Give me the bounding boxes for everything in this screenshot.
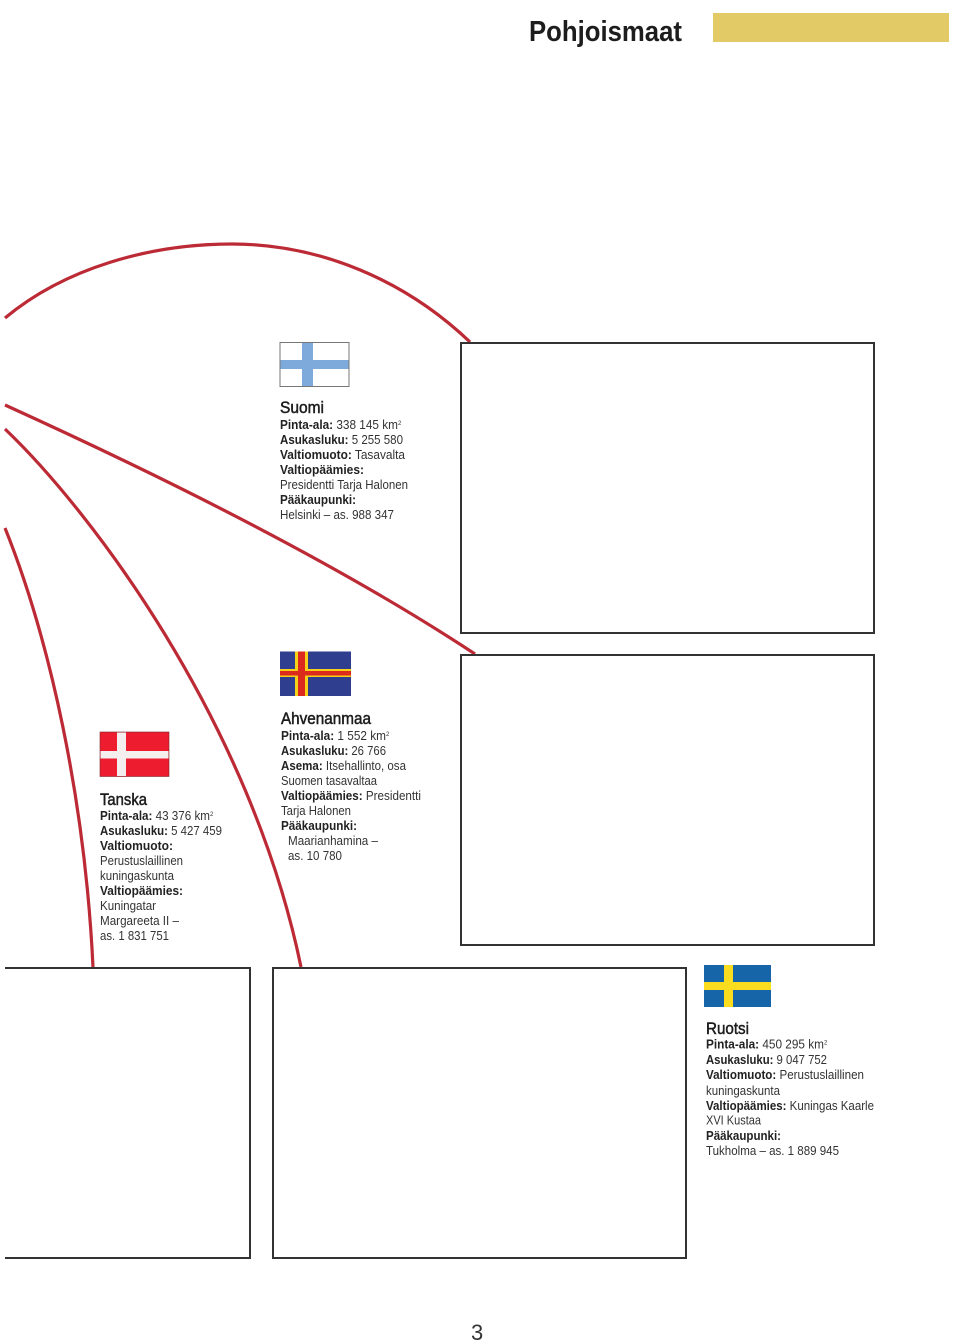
panel: Suomi image frame (461, 343, 874, 633)
icon: flag of Sweden (704, 965, 771, 1007)
facts: Ruotsi (706, 1038, 874, 1158)
facts: Ahvenanmaa: Asukasluku: 26 766 (281, 744, 386, 758)
facts: Suomi: Valtiomuoto: Tasavalta (280, 448, 405, 462)
facts: Ahvenanmaa: Asema: Itsehallinto, osa (281, 759, 406, 773)
facts: Suomi: Helsinki – as. 988 347 (280, 508, 394, 522)
curve: Ahvenanmaa connector (5, 405, 475, 654)
facts: Tanska: Asukasluku: 5 427 459 (100, 824, 222, 838)
facts: Suomi (280, 418, 408, 522)
panel: Tanska (100, 732, 222, 943)
facts: Suomi: 2 (398, 421, 402, 427)
facts: Tanska: Valtiomuoto: (100, 839, 173, 853)
facts: Ruotsi: Pinta-ala: 450 295 km (706, 1038, 824, 1052)
facts: Tanska: Pinta-ala: 43 376 km (100, 809, 210, 823)
facts: Ruotsi: Tukholma – as. 1 889 945 (706, 1144, 839, 1158)
panel: Ahvenanmaa (280, 652, 421, 863)
facts: Ahvenanmaa: Tarja Halonen (281, 804, 351, 818)
panel: Suomi (280, 342, 408, 522)
facts: Tanska: 2 (210, 812, 214, 818)
icon: flag of Finland (280, 342, 349, 386)
facts: Suomi: Pääkaupunki: (280, 493, 356, 507)
facts: Ruotsi: kuningaskunta (706, 1084, 780, 1098)
curve: Tanska inner connector (5, 528, 93, 967)
facts: Ahvenanmaa (281, 729, 421, 863)
facts: Tanska: Margareeta II – (100, 914, 179, 928)
heading: Tanska: Tanska (100, 791, 148, 809)
curve: Suomi map arc (5, 244, 470, 342)
facts: Ruotsi: Valtiomuoto: Perustuslaillinen (706, 1068, 864, 1082)
facts: Ahvenanmaa: Pinta-ala: 1 552 km (281, 729, 386, 743)
curve: Tanska outer connector (5, 429, 301, 967)
facts: Ahvenanmaa: Suomen tasavaltaa (281, 774, 377, 788)
facts: Ruotsi: Asukasluku: 9 047 752 (706, 1053, 827, 1067)
facts: Tanska: Perustuslaillinen (100, 854, 183, 868)
facts: Ruotsi: Pääkaupunki: (706, 1129, 781, 1143)
facts: Ahvenanmaa: as. 10 780 (288, 849, 342, 863)
title accent bar (713, 13, 949, 42)
panel: Ruotsi image frame (273, 968, 686, 1258)
heading: Suomi: Suomi (280, 399, 324, 417)
heading: Ahvenanmaa: Ahvenanmaa (281, 710, 372, 728)
heading: Ruotsi: Ruotsi (706, 1020, 749, 1038)
title: Pohjoismaat (529, 16, 682, 48)
facts: Tanska: as. 1 831 751 (100, 929, 169, 943)
panel: Tanska image frame (5, 968, 250, 1258)
facts: Tanska: Valtiopäämies: (100, 884, 183, 898)
panel: Ruotsi (704, 965, 874, 1158)
facts: Suomi: Valtiopäämies: (280, 463, 364, 477)
facts: Ruotsi: XVI Kustaa (706, 1114, 761, 1128)
facts: Suomi: Asukasluku: 5 255 580 (280, 433, 403, 447)
facts: Ahvenanmaa: Maarianhamina – (288, 834, 378, 848)
facts: Tanska: kuningaskunta (100, 869, 174, 883)
facts: Tanska (100, 809, 222, 943)
facts: Ahvenanmaa: Pääkaupunki: (281, 819, 357, 833)
facts: Tanska: Kuningatar (100, 899, 156, 913)
facts: Ahvenanmaa: Valtiopäämies: Presidentti (281, 789, 421, 803)
facts: Ahvenanmaa: 2 (386, 732, 390, 738)
icon: flag of Aland (280, 652, 351, 696)
panel: Ahvenanmaa image frame (461, 655, 874, 945)
facts: Ruotsi: Valtiopäämies: Kuningas Kaarle (706, 1099, 874, 1113)
facts: Suomi: Presidentti Tarja Halonen (280, 478, 408, 492)
red connector curves (5, 244, 475, 967)
icon: flag of Denmark (100, 732, 169, 776)
facts: Ruotsi: 2 (824, 1040, 828, 1046)
facts: Suomi: Pinta-ala: 338 145 km (280, 418, 398, 432)
